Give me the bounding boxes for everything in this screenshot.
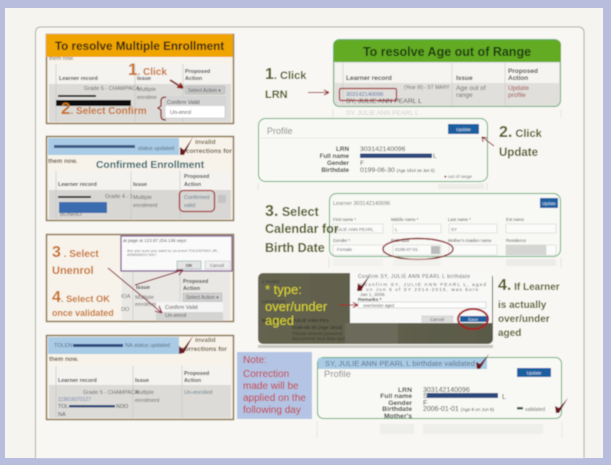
step 4 if learner over/under aged: over/under: [498, 314, 550, 325]
check mark: [179, 336, 193, 354]
status banner: [48, 337, 179, 354]
form labels: Last name *: [448, 217, 471, 222]
profile values: 303142140096: [423, 387, 470, 394]
table: confirmed: BONRIO: [60, 212, 82, 218]
arrows: to un-enrol and OK: [108, 268, 183, 313]
status banner: status updated: [138, 146, 174, 152]
background page text: [262, 279, 352, 342]
table row: profile: [508, 92, 526, 99]
table: un-enrolled: Learner record: [58, 378, 97, 384]
check mark: [180, 137, 193, 155]
callout: note: Note:: [243, 355, 267, 366]
form labels: Residence: [506, 238, 527, 243]
bracket: [158, 97, 166, 120]
step 4 if learner over/under aged: [498, 277, 560, 339]
profile values: [423, 387, 545, 413]
step 1 click: 1. Click: [128, 60, 167, 79]
panel: confirmed enrollment: [46, 136, 234, 220]
dialog: confirm un-enrol: Cancel: [210, 263, 224, 268]
arrow: to remarks: [338, 302, 358, 308]
table: select action: [49, 56, 231, 122]
dropdown menu: Un-enrol: [170, 110, 191, 116]
dropdown menu: Confirm Valid: [167, 100, 200, 106]
save button: Save: [468, 317, 479, 322]
cancel button: [422, 316, 453, 322]
profile fields: Mother's: [384, 413, 412, 420]
validated banner: SY, JULIE ANN PEARL L birthdate validated: [325, 359, 475, 368]
panel: type over/under aged: [258, 273, 493, 344]
reflection under learner form: [329, 258, 561, 268]
redacted name: [56, 95, 131, 106]
update button: [448, 124, 479, 134]
table: un-enrolled: Grade 5 - CHAMPACA: [83, 390, 139, 396]
step 3 select calendar: 3. Select: [265, 203, 319, 220]
table: confirmed: Learner record: [58, 182, 97, 188]
form values: SY: [451, 227, 457, 232]
profile values: L: [433, 153, 437, 160]
form labels: First name *: [333, 217, 356, 222]
table: un-enrolled: Multiple: [135, 390, 154, 396]
table: confirmed: Issue: [133, 182, 147, 188]
arrow: to LRN: [308, 90, 329, 95]
check mark: banner: [476, 354, 489, 369]
table row: range: [456, 92, 473, 99]
table row: Update: [508, 85, 529, 92]
panel: profile: [258, 118, 488, 182]
profile fields: Gender: [388, 400, 412, 407]
step 4 if learner over/under aged: aged: [498, 328, 521, 339]
table row: [346, 85, 529, 105]
background page text: x invalid: [262, 279, 280, 285]
cancel button: Cancel: [430, 317, 444, 322]
table row: Age out of: [456, 85, 486, 92]
modal dialog: 8 on Jun 6 of SY 2014-2015, was born: [360, 287, 478, 292]
profile fields: [320, 146, 350, 174]
table headings: Learner record: [346, 75, 392, 82]
profile values: S: [423, 393, 428, 400]
status banner: [48, 138, 179, 155]
profile values: L: [502, 394, 506, 401]
panel: validated profile: [318, 354, 568, 420]
profile values: ● out of range: [444, 174, 472, 179]
callout: note: [237, 352, 312, 419]
dropdown menu: [165, 97, 225, 118]
table: un-enrolled: NDO: [116, 404, 129, 410]
table: select un-enrol: Select Action ▾: [186, 295, 219, 301]
callout: note: applied on the: [243, 393, 306, 404]
panel: multiple enrollment select: [46, 34, 234, 124]
modal dialog: I confirm SY, JULIE ANN PEARL L, aged: [360, 282, 486, 287]
profile values: F: [423, 400, 427, 407]
profile values: 303142140096: [360, 146, 406, 153]
panel: un-enrol steps: [46, 234, 234, 322]
dropdown: un-enrol: [156, 302, 223, 321]
panel: un-enrolled result: them now.: [49, 357, 79, 363]
invalid corrections text: invalid: [195, 139, 216, 146]
table: un-enrolled: enrolment: [135, 398, 160, 404]
arrow: to update: [482, 137, 494, 146]
table: un-enrolled: Action: [184, 378, 202, 384]
table: confirmed: Action: [184, 182, 202, 188]
table row: SY, JULIE ANN PEARL L: [346, 98, 422, 105]
table: confirmed: enrolment: [133, 203, 158, 209]
step 3 select unenrol: [52, 244, 99, 277]
dialog: confirm un-enrol: ARMANDO NA?: [127, 252, 157, 257]
reflection under profile: [258, 183, 487, 190]
step 4 select ok: [52, 289, 114, 318]
highlight: confirmed valid: [180, 190, 214, 212]
background page text: Birthdate SY, JULIE ANN PEA: [262, 318, 330, 324]
table: confirmed: [49, 171, 231, 219]
profile values: F: [360, 160, 364, 167]
step 1 click LRN: LRN: [265, 89, 288, 101]
table: select action: Issue: [137, 76, 151, 82]
step 1 click LRN: [265, 66, 307, 101]
form labels: Mother's maiden name: [448, 238, 492, 243]
form values: Female: [337, 247, 353, 252]
table: select action: Grade 5 - CHAMPACA: [84, 86, 140, 92]
background page text: documents and data update: [292, 336, 352, 342]
reflection under dark panel: [258, 345, 493, 348]
table: confirmed: Grade 4 - 1: [105, 194, 133, 200]
panel: age out of range: [334, 40, 561, 106]
modal dialog: over/under aged: [363, 303, 395, 308]
check mark: validated: [555, 398, 568, 413]
dialog: confirm un-enrol: at page at 123.97.254.136 says:: [123, 238, 187, 243]
table: select un-enrol: Multiple: [135, 295, 154, 301]
table: select action: Multiple: [137, 87, 156, 93]
table: select action: enrolme: [137, 95, 157, 101]
form values: [335, 227, 457, 252]
panel: confirmed enrollment: corrections for: [186, 148, 232, 155]
table: confirmed: valid: [184, 203, 195, 209]
table: confirmed: Proposed: [184, 174, 209, 180]
step 3 select unenrol: Unenrol: [52, 265, 94, 277]
step 3 select calendar: [265, 203, 339, 255]
profile values: [360, 146, 472, 179]
table headings: Proposed: [508, 68, 538, 75]
update button: [517, 368, 551, 377]
type over/under aged text: * type:: [265, 282, 302, 297]
panel: validated profile: Profile: [324, 369, 351, 380]
table: select un-enrol: enrolment: [135, 302, 160, 308]
background page text: corrections: [262, 299, 286, 305]
background page text: Please ensure personal: [292, 331, 342, 337]
form values: L: [395, 227, 398, 232]
profile values: 2006-01-01 (Age 8 on Jun 6): [423, 406, 495, 413]
highlight: save: [458, 309, 488, 329]
step 4 if learner over/under aged: is actually: [498, 300, 547, 311]
type over/under aged text: aged: [265, 313, 294, 328]
table: select action: Action: [185, 76, 203, 82]
table: select un-enrol: Proposed: [183, 279, 208, 285]
dropdown: un-enrol: Un-enrol: [165, 313, 186, 319]
lighter page area: [345, 323, 398, 344]
callout: note: following day: [243, 405, 301, 416]
form labels: Gender *: [333, 238, 351, 243]
title: age out of range: [334, 40, 561, 62]
panel: learner form: [330, 194, 560, 260]
form labels: Middle name *: [391, 217, 419, 222]
panel: un-enrolled result: corrections for: [181, 346, 227, 353]
step 4 select ok: 4. Select OK: [52, 289, 110, 306]
table: select action: Proposed: [185, 69, 210, 75]
table: select un-enrol: IOA: [121, 294, 131, 300]
step 4 select ok: once validated: [52, 308, 114, 318]
table: un-enrolled: TOL: [58, 404, 69, 410]
update button: Update: [542, 201, 557, 206]
update button: Update: [527, 370, 542, 376]
title: multiple enrollment: [46, 34, 233, 57]
status banner: TOLEN: [54, 343, 72, 349]
step 1 click LRN: 1. Click: [265, 66, 307, 83]
table: confirmed: Multiple: [133, 195, 152, 201]
table: confirmed: Confirmed: [184, 195, 209, 201]
profile fields: Gender: [327, 160, 350, 167]
dialog: confirm un-enrol: [121, 236, 232, 271]
profile fields: Birthdate: [382, 406, 412, 413]
form values: 0199-07-01: [395, 247, 419, 252]
table row: 303142140096: [346, 92, 383, 98]
form values: JULIE ANN PEARL: [335, 227, 374, 232]
table: select action: Learner record: [59, 76, 98, 82]
step 3 select unenrol: 3 . Select: [52, 244, 99, 261]
reflection under age panel: [333, 109, 561, 118]
validated icon: [517, 407, 523, 410]
step 2 click update: [499, 124, 543, 159]
profile fields: LRN: [336, 146, 349, 153]
status banner: NA status updated: [125, 343, 170, 349]
reflection under validated profile: [317, 421, 562, 438]
panel: un-enrolled result: [46, 336, 234, 420]
step 2 select confirm: 2. Select Confirm: [61, 99, 147, 118]
table row: (Year III) - ST MARY: [404, 85, 450, 91]
profile fields: LRN: [398, 387, 412, 394]
table: select un-enrol: Action: [183, 286, 201, 292]
save button: [460, 316, 487, 322]
profile fields: Full name: [380, 393, 412, 400]
update button: [540, 198, 558, 208]
step 2 click update: 2. Click: [499, 124, 543, 141]
profile fields: [380, 387, 412, 420]
heading: confirmed enrollment: Confirmed Enrollment: [96, 160, 205, 171]
panel: learner form: Learner 303142140096: [333, 201, 390, 207]
dialog: confirm un-enrol: OK: [186, 263, 193, 268]
form labels: [333, 217, 527, 243]
table: un-enrolled: 119916070127: [58, 397, 91, 403]
table: select un-enrol: DO: [121, 307, 130, 313]
check mark: [357, 275, 370, 291]
modal dialog: [350, 273, 492, 323]
modal dialog: Confirm SY, JULIE ANN PEARL L birthdate: [358, 274, 470, 280]
callout: note: made will be: [243, 381, 299, 392]
step 3 select calendar: Birth Date: [265, 241, 325, 255]
panel: confirmed enrollment: them now.: [48, 159, 78, 165]
invalid corrections text: invalid: [195, 337, 216, 344]
reflection under age panel: SY, JULIE ANN PEARL L: [346, 110, 419, 117]
step 4 if learner over/under aged: 4. If Learner: [498, 277, 560, 294]
table: un-enrolled: [49, 366, 231, 418]
profile fields: Birthdate: [321, 167, 349, 174]
highlight: birth date: [383, 238, 453, 260]
arrow: to select action: [170, 80, 183, 88]
table: un-enrolled: Proposed: [184, 371, 209, 377]
type over/under aged text: [265, 282, 328, 328]
background page text: 0199-06-30 (Age 1814): [292, 325, 343, 331]
modal dialog: Jan 1, 2006.: [360, 292, 386, 297]
dropdown: un-enrol: Confirm Valid: [165, 305, 198, 311]
table: select un-enrol: [121, 272, 230, 320]
table headings: Action: [508, 75, 528, 82]
update button: Update: [456, 127, 471, 132]
form labels: Ext name: [506, 217, 525, 222]
table: select action: them now.: [49, 56, 75, 62]
highlight: LRN: [340, 88, 396, 100]
title: age out of range: To resolve Age out of Range: [363, 45, 531, 59]
profile values: validated: [525, 407, 545, 413]
profile fields: Full name: [320, 153, 349, 160]
table: un-enrolled: Un-enrolled: [184, 390, 212, 396]
step 2 click update: Update: [499, 147, 538, 159]
table: un-enrolled: Issue: [135, 378, 149, 384]
calendar button: [431, 246, 440, 254]
profile values: 0199-06-30 (Age 1814 on Jun 6): [360, 167, 435, 174]
table: select action: Select Action ▾: [188, 88, 221, 94]
modal dialog: Remarks *: [358, 297, 382, 303]
table headings: [346, 68, 538, 82]
table headings: Issue: [456, 75, 473, 82]
form inputs: [333, 224, 556, 255]
table: un-enrolled: NA: [58, 412, 66, 418]
callout: note: Correction: [243, 369, 289, 380]
title: multiple enrollment: To resolve Multiple Enrollment: [55, 40, 224, 53]
dialog: confirm un-enrol: Are you sure you want to un-enrol TOLENTINO JR.,: [127, 248, 219, 253]
form labels: Birth date: [391, 238, 410, 243]
type over/under aged text: over/under: [265, 299, 328, 314]
panel: profile: Profile: [267, 126, 293, 136]
step 3 select calendar: Calendar for: [265, 222, 339, 236]
table: select un-enrol: Issue: [136, 285, 150, 291]
